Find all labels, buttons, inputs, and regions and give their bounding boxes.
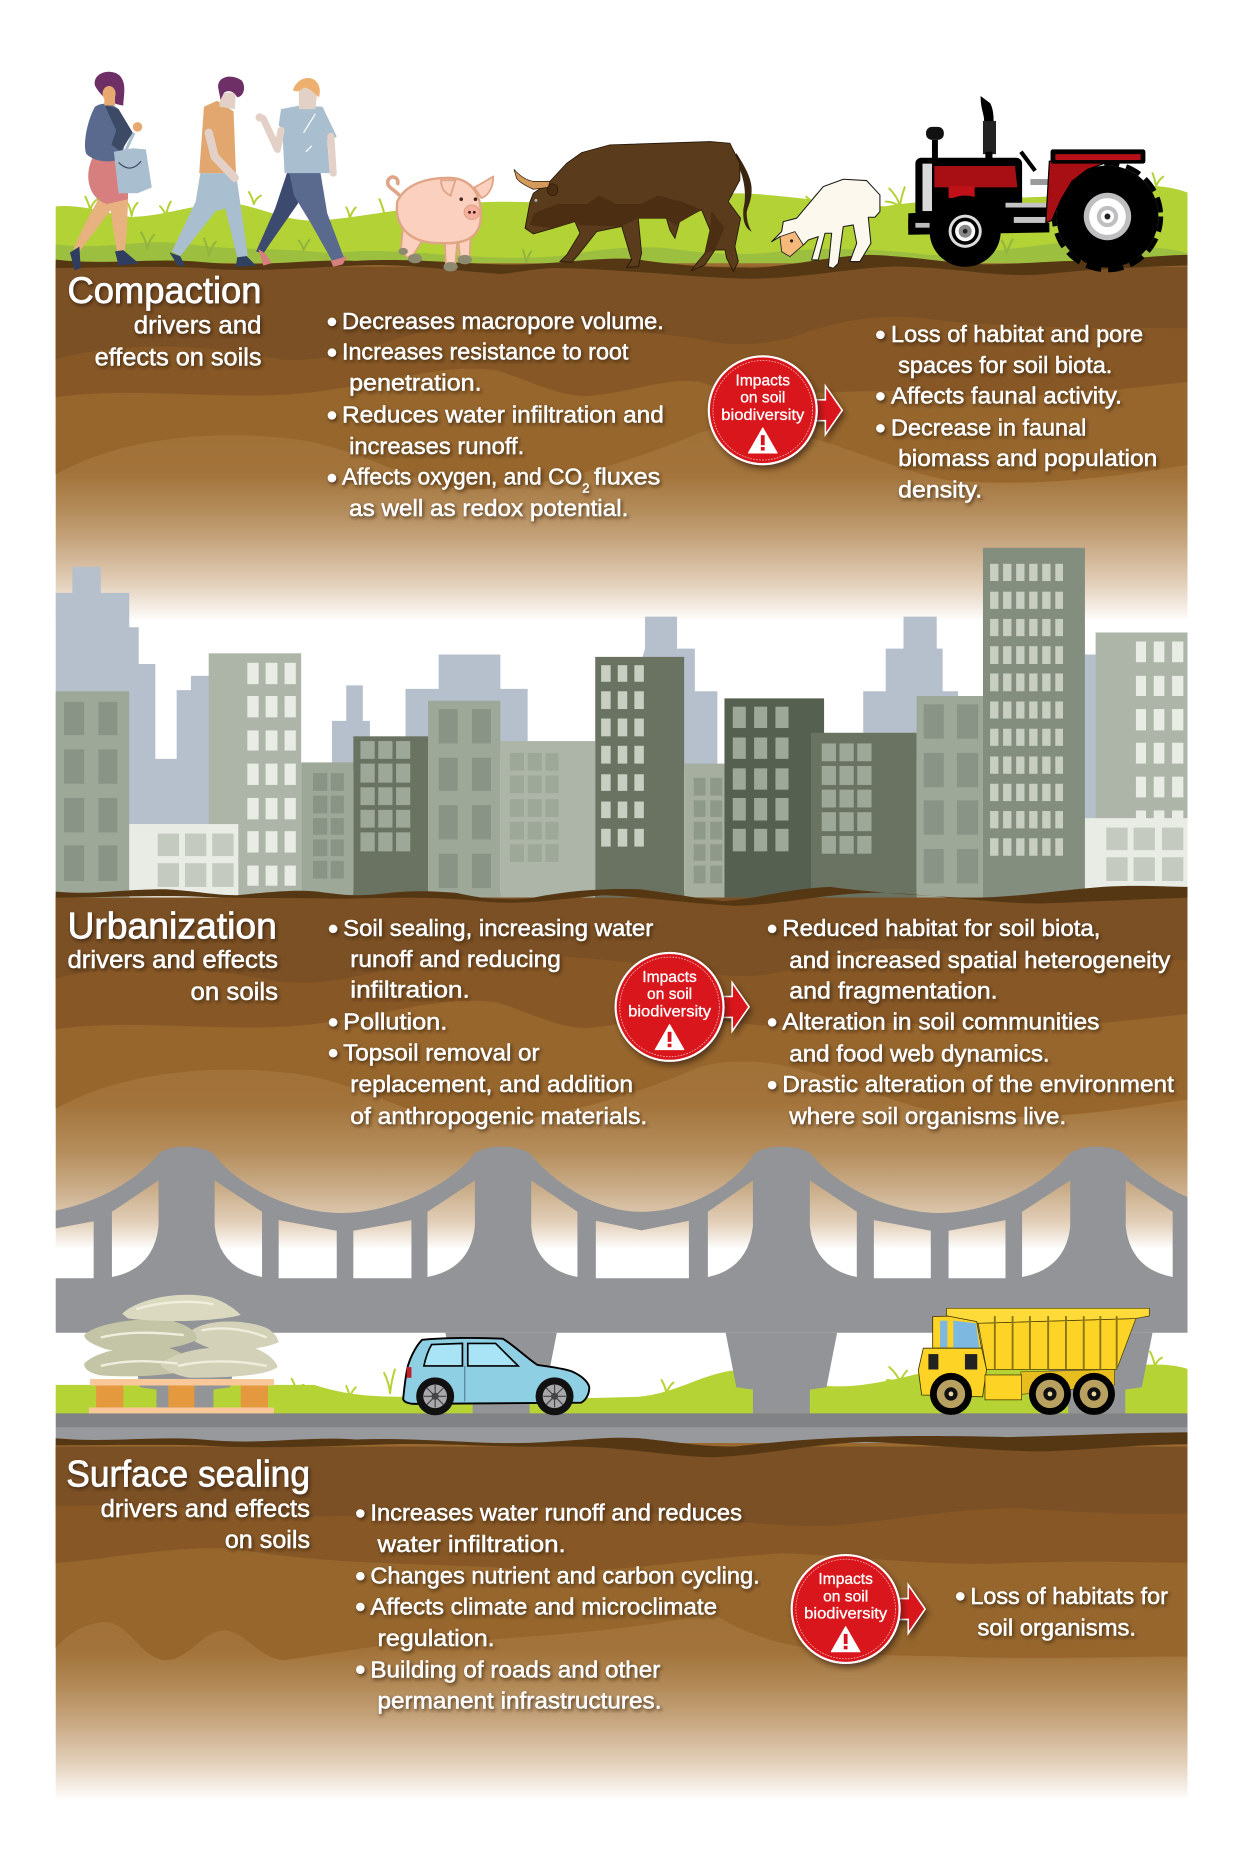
text block: urbanization impacts: and increased spatial heterogeneity	[789, 947, 1171, 973]
soil layer: top band	[56, 898, 1189, 983]
soil layer: lower band	[56, 1447, 1189, 1660]
heading: urbanization	[67, 905, 278, 1006]
callout: impacts on soil biodiversity (compaction): on soil	[740, 390, 785, 407]
illustration: sandbags on pallet	[84, 1295, 279, 1413]
text block: compaction drivers and effects: penetration.	[349, 370, 482, 396]
soil layer: top band	[56, 1447, 1189, 1526]
panel: urbanization	[56, 548, 1189, 1247]
text block: surface sealing drivers and effects: Building of roads and other	[370, 1656, 661, 1682]
heading: urbanization: drivers and effects	[67, 947, 278, 974]
grass behind bridge and road	[56, 1352, 1189, 1415]
heading: urbanization: on soils	[191, 979, 278, 1006]
illustration: blue car	[403, 1338, 589, 1415]
heading: compaction: drivers and	[134, 313, 262, 340]
text block: compaction drivers and effects: as well as redox potential.	[349, 495, 628, 521]
text block: urbanization impacts: and fragmentation.	[789, 978, 998, 1004]
text block: urbanization drivers and effects: runoff and reducing	[350, 946, 561, 972]
illustration: bull	[514, 142, 752, 272]
text block: compaction impacts: Decrease in faunal	[891, 414, 1086, 440]
text block: compaction drivers and effects: 2	[582, 480, 589, 495]
callout: impacts on soil biodiversity (urbanization)	[616, 953, 749, 1061]
text block: urbanization impacts: Drastic alteration of the environment	[782, 1071, 1174, 1097]
text block: surface sealing drivers and effects: water infiltration.	[376, 1531, 566, 1557]
front darker grass	[56, 173, 1189, 273]
soil body with fade	[56, 263, 1189, 619]
panel: surface sealing	[56, 1147, 1189, 1798]
heading: surface sealing: on soils	[225, 1527, 310, 1554]
text block: urbanization impacts: where soil organisms live.	[788, 1103, 1066, 1129]
city buildings	[56, 548, 1189, 904]
text block: compaction drivers and effects: increases runoff.	[349, 433, 524, 459]
text block: surface sealing impacts: Loss of habitats for	[970, 1583, 1168, 1609]
text block: surface sealing impacts	[956, 1583, 1168, 1640]
text block: urbanization drivers and effects: infiltration.	[350, 977, 470, 1003]
callout: impacts on soil biodiversity (urbanization): Impacts	[642, 969, 697, 986]
illustration: woman with bag	[70, 72, 152, 270]
heading: urbanization: Urbanization	[67, 905, 277, 946]
text block: compaction impacts: biomass and population	[898, 445, 1157, 471]
road surface	[56, 1413, 1189, 1456]
text block: compaction drivers and effects: fluxes	[594, 464, 660, 490]
text block: urbanization drivers and effects	[329, 915, 654, 1129]
text block: compaction impacts: density.	[898, 477, 982, 503]
soil layer: middle band	[56, 1447, 1189, 1571]
text block: compaction drivers and effects: Decreases macropore volume.	[342, 308, 664, 334]
callout: impacts on soil biodiversity (surface sealing): biodiversity	[804, 1605, 887, 1622]
soil layer: top band	[56, 267, 1189, 360]
callout: impacts on soil biodiversity (compaction)	[709, 356, 842, 464]
soil body with fade	[56, 1443, 1189, 1798]
text block: compaction impacts	[876, 321, 1157, 503]
text block: surface sealing drivers and effects: permanent infrastructures.	[377, 1688, 661, 1714]
background green grass hills	[56, 186, 1189, 273]
text block: compaction impacts: spaces for soil biota.	[898, 352, 1112, 378]
text block: urbanization drivers and effects: of anthropogenic materials.	[350, 1103, 647, 1129]
soil layer: lower band	[56, 267, 1189, 490]
heading: compaction	[67, 270, 262, 372]
text block: compaction drivers and effects: Affects oxygen, and CO	[342, 464, 582, 490]
text block: compaction drivers and effects	[328, 308, 664, 521]
callout: impacts on soil biodiversity (compaction): biodiversity	[721, 407, 804, 424]
text block: urbanization impacts	[768, 915, 1174, 1129]
callout: impacts on soil biodiversity (urbanization): biodiversity	[628, 1003, 711, 1020]
soil layer: middle band	[56, 898, 1189, 1029]
illustration: yellow dump truck	[918, 1308, 1149, 1415]
soil body with fade	[56, 892, 1189, 1247]
illustration: sheep	[772, 179, 880, 268]
text block: urbanization drivers and effects: Soil sealing, increasing water	[343, 915, 654, 941]
panel: compaction	[56, 72, 1189, 619]
text block: compaction drivers and effects: Reduces water infiltration and	[342, 401, 664, 427]
dark topsoil line	[56, 255, 1189, 279]
text block: surface sealing drivers and effects: regulation.	[377, 1625, 495, 1651]
text block: compaction impacts: Affects faunal activity.	[891, 383, 1122, 409]
callout: impacts on soil biodiversity (surface sealing): on soil	[823, 1588, 868, 1605]
text block: surface sealing drivers and effects	[356, 1500, 760, 1714]
text block: compaction drivers and effects: Increases resistance to root	[342, 339, 629, 365]
illustration: man in orange shirt	[170, 77, 256, 267]
illustration: tractor	[908, 96, 1161, 270]
text block: compaction impacts: Loss of habitat and pore	[891, 321, 1143, 347]
dark topsoil line	[56, 886, 1189, 906]
heading: surface sealing: drivers and effects	[101, 1496, 310, 1523]
text block: urbanization impacts: Reduced habitat for soil biota,	[782, 915, 1101, 941]
dark topsoil line	[56, 1432, 1189, 1457]
callout: impacts on soil biodiversity (surface sealing)	[792, 1555, 925, 1663]
heading: surface sealing: Surface sealing	[66, 1453, 310, 1494]
illustration: pig	[388, 177, 493, 272]
callout: impacts on soil biodiversity (compaction): Impacts	[735, 372, 790, 389]
text block: surface sealing impacts: soil organisms.	[977, 1614, 1136, 1640]
bridge: suspension cables, towers and deck	[56, 1147, 1189, 1333]
bridge piers	[129, 1333, 1153, 1413]
callout: impacts on soil biodiversity (surface sealing): Impacts	[818, 1571, 873, 1588]
city skyline background silhouettes	[56, 567, 1098, 901]
text block: surface sealing drivers and effects: Changes nutrient and carbon cycling.	[370, 1562, 760, 1588]
illustration: man in blue shirt	[256, 78, 347, 267]
text block: urbanization drivers and effects: Topsoil removal or	[343, 1039, 540, 1065]
text block: urbanization drivers and effects: replacement, and addition	[350, 1071, 633, 1097]
text block: surface sealing drivers and effects: Increases water runoff and reduces	[370, 1500, 742, 1526]
text block: urbanization impacts: and food web dynamics.	[789, 1040, 1050, 1066]
heading: compaction: effects on soils	[95, 345, 262, 372]
callout: impacts on soil biodiversity (urbanization): on soil	[647, 986, 692, 1003]
soil layer: lower band	[56, 898, 1189, 1124]
text block: surface sealing drivers and effects: Affects climate and microclimate	[370, 1594, 717, 1620]
heading: compaction: Compaction	[67, 270, 262, 311]
soil layer: middle band	[56, 267, 1189, 397]
heading: surface sealing	[66, 1453, 310, 1554]
text block: urbanization impacts: Alteration in soil communities	[782, 1009, 1099, 1035]
text block: urbanization drivers and effects: Pollution.	[343, 1009, 447, 1035]
